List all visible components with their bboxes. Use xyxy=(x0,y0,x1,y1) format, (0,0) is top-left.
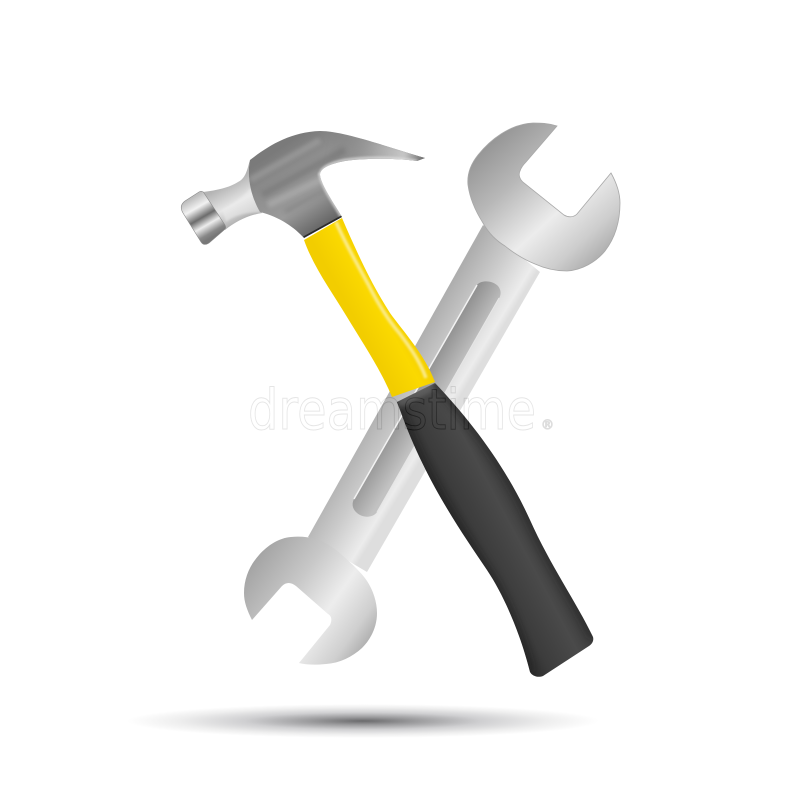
wrench shaft xyxy=(308,225,540,572)
hammer xyxy=(181,128,593,677)
illustration: crossed hammer and wrench xyxy=(152,122,620,736)
wrench xyxy=(244,123,620,665)
watermark: ® xyxy=(541,418,554,433)
hammer head with claw xyxy=(249,128,430,238)
hammer neck xyxy=(203,160,262,230)
wrench lower jaw xyxy=(244,537,377,665)
wrench upper jaw xyxy=(468,123,620,271)
hammer cap xyxy=(181,191,226,244)
hammer yellow grip xyxy=(304,218,435,397)
watermark: dreamstime xyxy=(248,378,536,443)
wrench slot xyxy=(353,281,501,517)
ground shadow xyxy=(127,704,599,738)
hammer black grip xyxy=(393,380,593,677)
